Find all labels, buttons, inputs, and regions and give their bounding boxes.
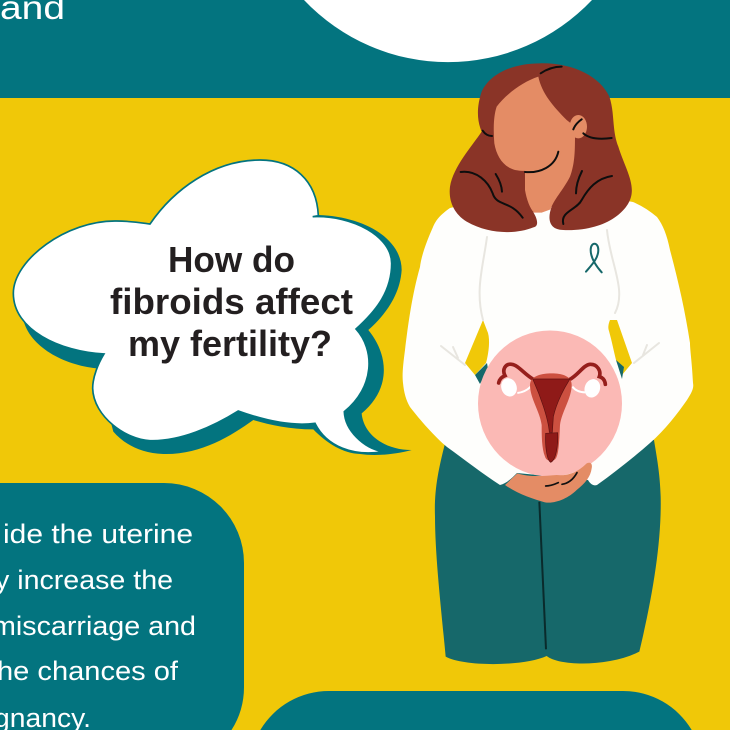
trouser centre seam <box>539 502 546 649</box>
panel body text: ide the uterine <box>3 519 193 549</box>
uterus outer wall <box>530 373 572 461</box>
panel body text: he chances of <box>0 656 179 686</box>
speech bubble question <box>110 239 353 364</box>
left gap between arm and torso <box>465 320 489 375</box>
awareness ribbon <box>586 244 602 272</box>
panel body text: y increase the <box>0 565 173 595</box>
trousers <box>435 440 661 664</box>
white circle in banner <box>304 0 592 62</box>
left ovary <box>499 376 519 399</box>
uterus diagram <box>499 364 605 462</box>
panel body text <box>0 519 196 730</box>
sleeve folds <box>441 230 659 365</box>
top teal banner <box>0 0 730 98</box>
speech bubble question: my fertility? <box>128 323 332 364</box>
hair <box>450 63 632 232</box>
woman illustration <box>403 63 693 664</box>
ovary ligaments <box>517 387 585 393</box>
white top with arms <box>403 197 693 485</box>
speech bubble shadow <box>23 215 412 455</box>
panel: miscarriage text <box>0 483 244 730</box>
panel: bottom teal <box>260 691 692 730</box>
hands <box>505 463 592 503</box>
pink circle <box>478 330 622 476</box>
speech bubble question: How do <box>168 239 295 280</box>
vaginal canal <box>546 433 558 462</box>
finger lines <box>546 473 577 486</box>
uterus inner cavity <box>533 379 570 432</box>
speech bubble <box>13 160 412 455</box>
hair strands <box>461 67 612 224</box>
left waist strip <box>475 363 488 384</box>
neck <box>525 133 575 213</box>
right waist strip <box>616 360 624 379</box>
right ovary <box>582 377 603 400</box>
face <box>494 77 575 171</box>
ear <box>570 115 587 138</box>
fallopian tubes <box>499 364 605 384</box>
right gap between arm and torso <box>608 320 632 375</box>
speech bubble body <box>13 160 392 453</box>
speech bubble question: fibroids affect <box>110 281 353 322</box>
